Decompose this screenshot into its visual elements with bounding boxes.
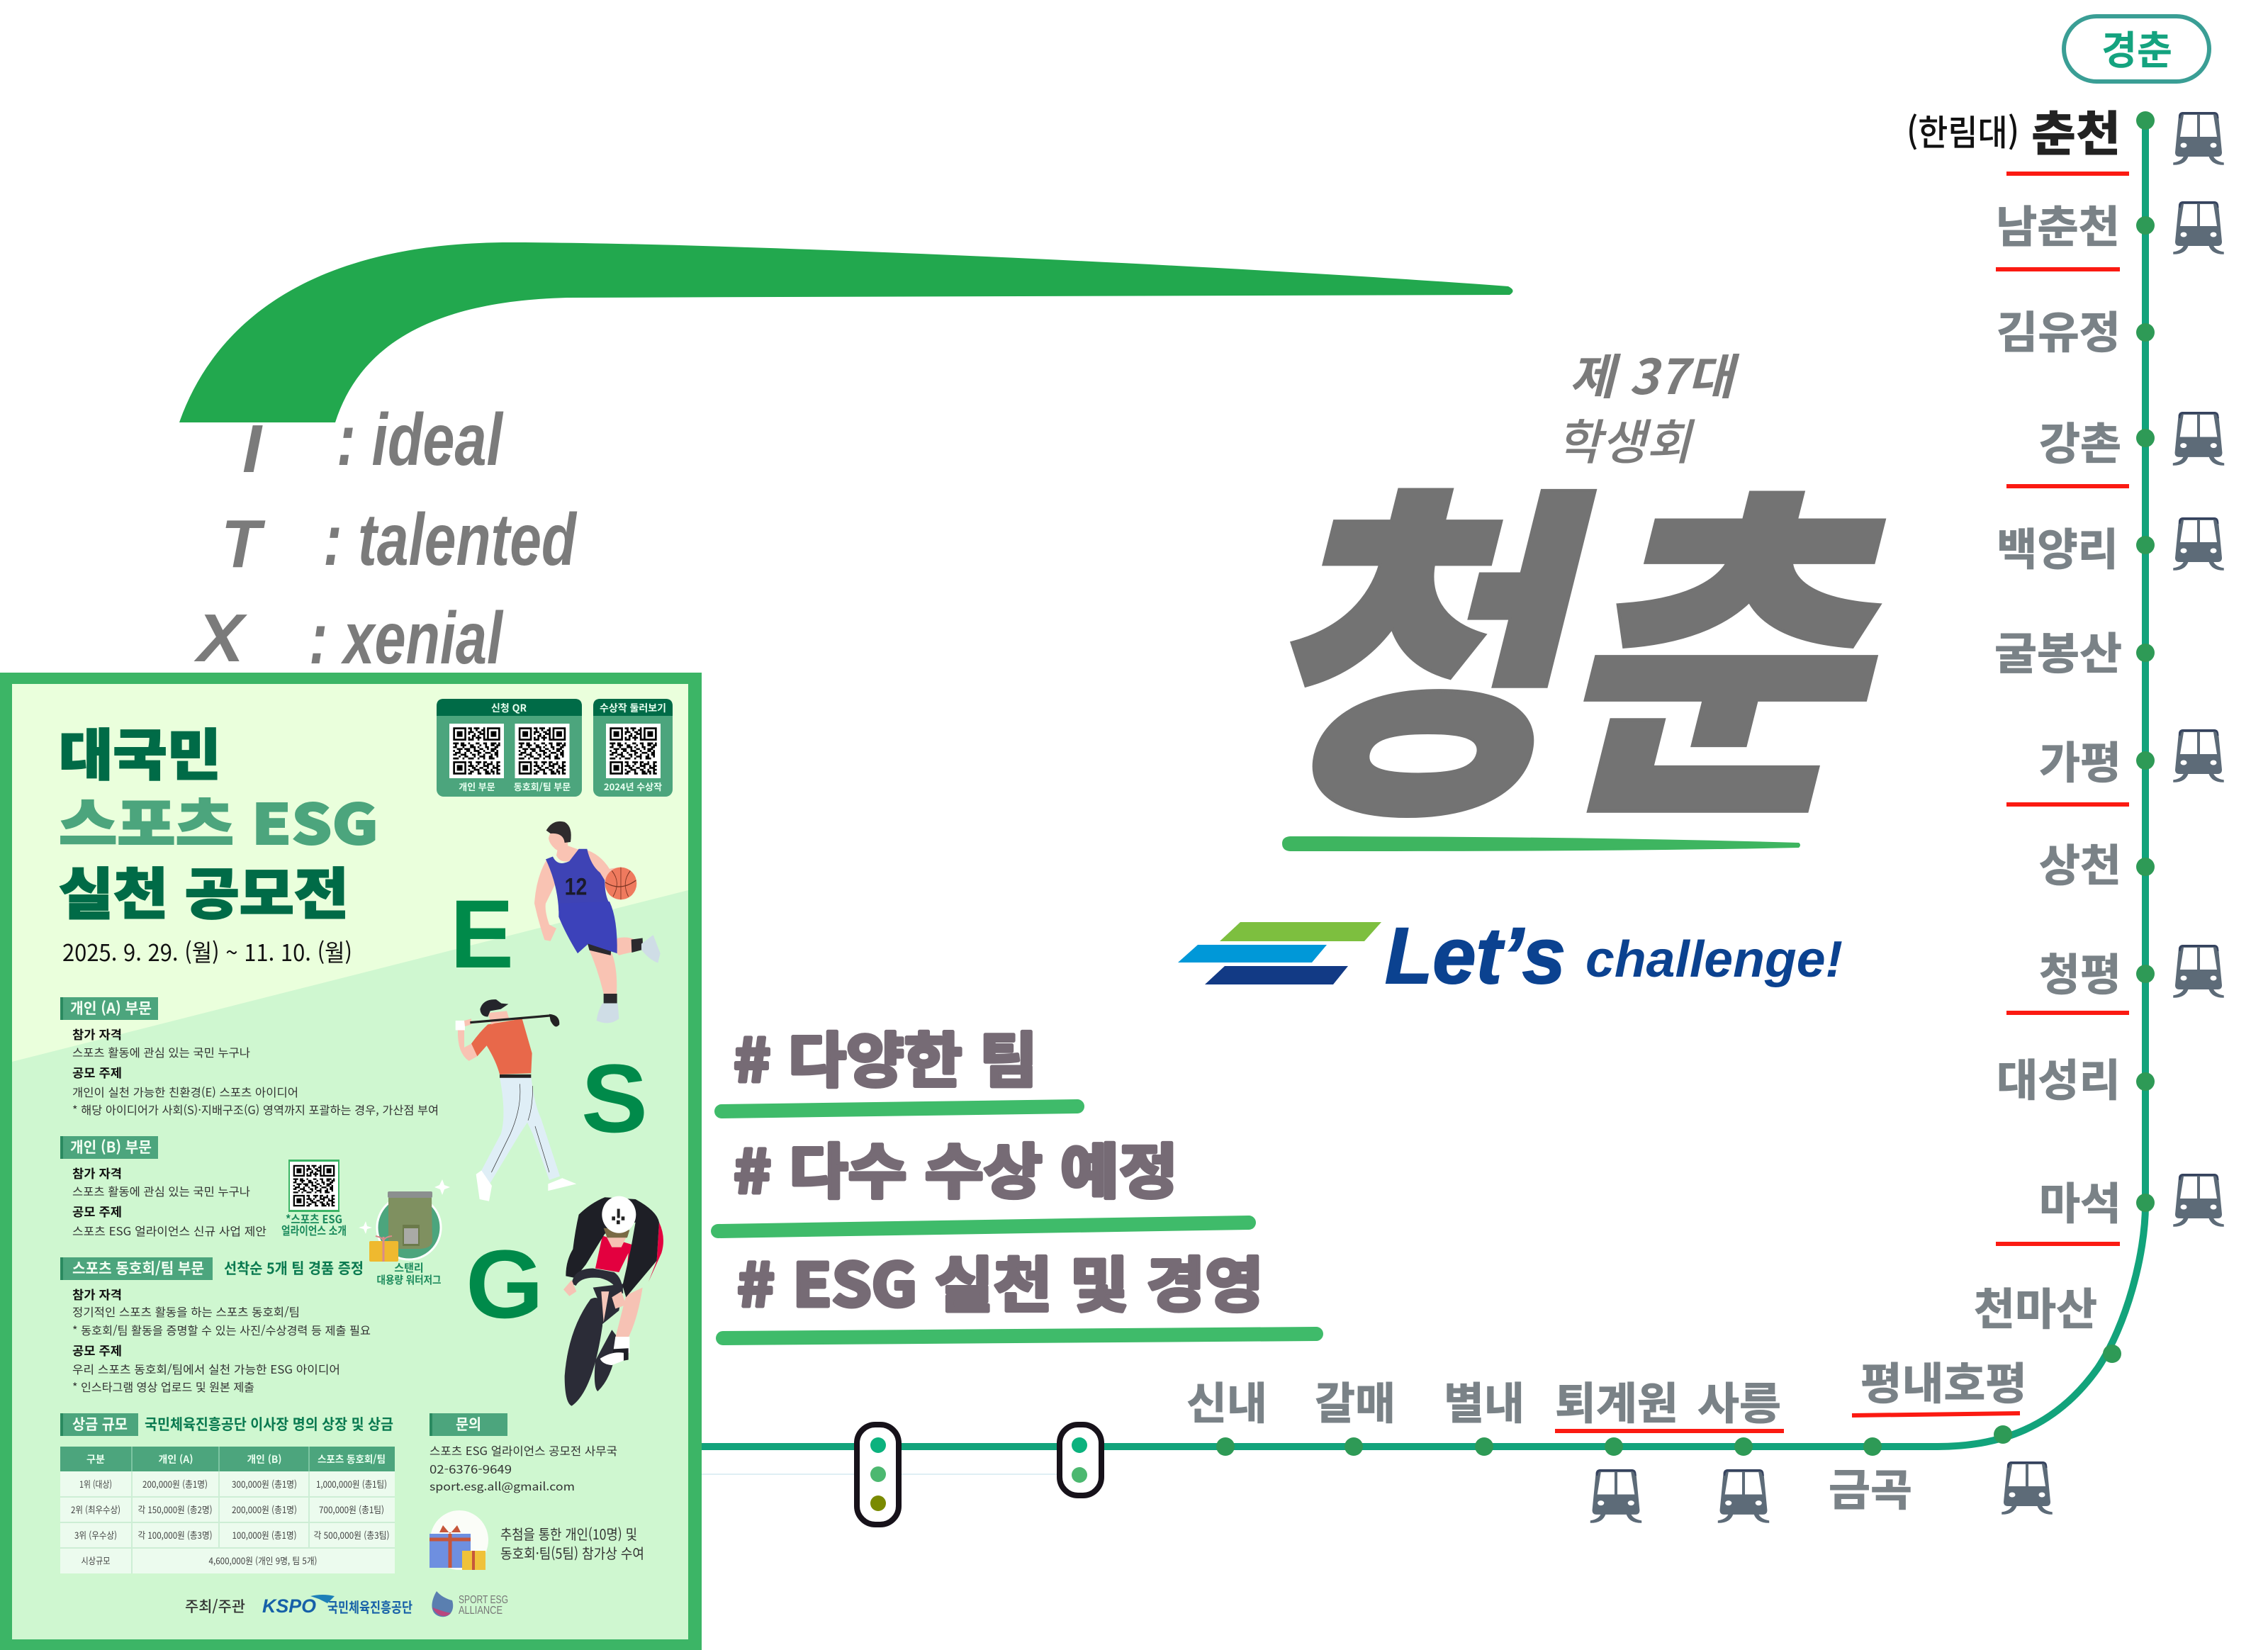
application QR card: 신청 QR [491,701,527,715]
letter E: E [450,880,514,989]
alliance QR [281,1160,347,1238]
red underlines marking stations [1555,174,2129,1431]
section: contact: 스포츠 ESG 얼라이언스 공모전 사무국 [430,1442,617,1459]
letter I: I [242,411,263,487]
section: individual A: 참가 자격 [72,1025,122,1043]
council number: 제 37대 [1566,338,1748,408]
section: individual B: 참가 자격 [72,1164,122,1182]
line name pill: 경춘 [2101,19,2172,77]
section: sports clubs: 공모 주제 [72,1341,122,1359]
line name pill [2064,16,2209,82]
section: prizes: 상금 규모 [72,1413,128,1435]
section: individual B: 스포츠 활동에 관심 있는 국민 누구나 [72,1182,250,1199]
poster date: 2025. 9. 29. (월) ~ 11. 10. (월) [62,934,352,968]
section: contact: 문의 [456,1413,481,1435]
Sangcheon: 상천 [2039,830,2121,894]
participation gift [430,1510,644,1570]
winners QR card [593,699,673,797]
poster footer logos: SPORT ESG [459,1594,508,1606]
poster title: 실천 공모전 [59,851,349,930]
section: sports clubs: 우리 스포츠 동호회/팀에서 실천 가능한 ESG 아이디어 [72,1360,340,1377]
Chuncheon: 춘천 [2031,95,2121,165]
prize table: 100,000원 (총1명) [232,1528,296,1542]
section: contact [430,1413,617,1494]
poster panel [0,673,702,1650]
Cheongpyeong: 청평 [2039,939,2121,1003]
alliance QR: 얼라이언스 소개 [281,1221,347,1238]
poster title: 대국민 [59,712,221,791]
prize table: 2위 (최우수상) [71,1503,120,1516]
Byeollae: 별내 [1444,1368,1525,1432]
logo tagline: challenge! [1585,931,1843,988]
Baegyangni: 백양리 [1997,514,2118,578]
council word: 학생회 [1553,403,1705,473]
prize table: 1위 (대상) [79,1477,112,1491]
poster footer logos: 주최/주관 [185,1595,245,1617]
section: individual B: 개인 (B) 부문 [70,1136,152,1157]
Gimyujeong: 김유정 [1997,297,2121,361]
signal light 1 [857,1425,899,1525]
Pyeongnaehopyeong: 평내호평 [1860,1348,2027,1412]
Namchuncheon: 남춘천 [1996,191,2120,255]
green swoosh [179,242,1513,422]
prize table: 시상규모 [81,1554,111,1567]
Sinnae: 신내 [1186,1368,1267,1432]
section: individual A: 스포츠 활동에 관심 있는 국민 누구나 [72,1043,250,1060]
prize table: 1,000,000원 (총1팀) [316,1477,387,1491]
prize table: 개인 (B) [247,1452,282,1466]
prize table [60,1447,395,1573]
section: sports clubs: 선착순 5개 팀 경품 증정 [224,1257,364,1279]
station dots [1216,111,2155,1456]
illustration: basketball player [534,821,661,1023]
hashtag 2 underline [718,1223,1249,1231]
hashtag 2: # 다수 수상 예정 [734,1125,1178,1211]
section: sports clubs: 정기적인 스포츠 활동을 하는 스포츠 동호회/팀 [72,1303,300,1320]
section: sports clubs [60,1257,371,1395]
prize table: 3위 (우수상) [74,1528,117,1542]
student council heading [1553,338,1748,473]
section: contact: 02-6376-9649 [430,1460,512,1477]
talented: : talented [323,499,578,581]
ITX acronym list [193,399,578,680]
ideal: : ideal [337,399,504,481]
application QR card: 개인 부문 [459,780,495,793]
prize table: 4,600,000원 (개인 9명, 팀 5개) [208,1554,318,1567]
poster title: 스포츠 ESG [59,781,378,860]
Galmae: 갈매 [1315,1368,1396,1432]
section: individual A: * 해당 아이디어가 사회(S)·지배구조(G) 영역까지 포괄하는 경우, 가산점 부여 [72,1101,439,1118]
poster footer logos [185,1591,508,1617]
Gapyeong: 가평 [2039,727,2121,791]
train icons [1591,112,2223,1522]
section: sports clubs: 스포츠 동호회/팀 부문 [72,1257,204,1279]
signal light 2 [1060,1425,1101,1495]
letter T: T [221,506,266,582]
title underline [1282,836,1800,851]
Gangchon: 강촌 [2039,408,2121,472]
logo bars [1178,922,1381,984]
application QR card: 동호회/팀 부문 [514,780,571,793]
winners QR card: 2024년 수상작 [604,780,662,793]
application QR card [437,699,582,797]
prize table: 스포츠 동호회/팀 [318,1452,386,1466]
illustration: golfer [456,999,576,1201]
station labels [1186,95,2122,1518]
big title 청춘: 청춘 [1224,381,1957,884]
section: sports clubs: * 인스타그램 영상 업로드 및 원본 제출 [72,1378,254,1395]
Stanley jug prize [359,1179,450,1287]
xenial: : xenial [309,597,504,680]
prize table: 개인 (A) [159,1452,193,1466]
section: individual A: 공모 주제 [72,1063,122,1081]
participation gift: 동호회·팀(5팀) 참가상 수여 [500,1542,644,1563]
Cheonmasan: 천마산 [1974,1274,2097,1337]
section: prizes: 국민체육진흥공단 이사장 명의 상장 및 상금 [145,1413,393,1435]
alliance QR: *스포츠 ESG [286,1210,342,1227]
hashtag 3 underline [723,1334,1316,1338]
prize table: 200,000원 (총1명) [142,1477,208,1491]
hashtag 3: # ESG 실천 및 경영 [737,1238,1264,1324]
Stanley jug prize: 대용량 워터저그 [377,1272,442,1287]
prize table: 700,000원 (총1팀) [319,1503,384,1516]
section: sports clubs: 참가 자격 [72,1285,122,1303]
metro line [702,120,2145,1474]
hashtag 1: # 다양한 팀 [734,1014,1038,1099]
section: individual B: 스포츠 ESG 얼라이언스 신규 사업 제안 [72,1222,266,1239]
Maseok: 마석 [2039,1168,2121,1232]
Daeseongni: 대성리 [1997,1045,2121,1109]
section: sports clubs: * 동호회/팀 활동을 증명할 수 있는 사진/수상경력 등 제출 필요 [72,1321,371,1338]
section: prizes [60,1413,393,1436]
Geumgok: 금곡 [1829,1454,1912,1518]
section: individual B [60,1136,266,1239]
Sareung: 사릉 [1697,1368,1781,1432]
prize table: 300,000원 (총1명) [232,1477,297,1491]
prize table: 200,000원 (총1명) [232,1503,297,1516]
letter X: X [193,600,247,676]
section: individual A [60,997,439,1118]
participation gift: 추첨을 통한 개인(10명) 및 [500,1523,637,1544]
hashtags [718,1014,1316,1338]
letter G: G [466,1230,544,1339]
poster footer logos: KSPO [262,1595,316,1617]
Gulbongsan: 굴봉산 [1994,618,2122,682]
letter S: S [581,1045,648,1153]
logo wordmark: Let’s [1385,911,1566,1000]
winners QR card: 수상작 둘러보기 [600,701,666,715]
Stanley jug prize: 스탠리 [394,1260,424,1275]
prize table: 각 500,000원 (총3팀) [313,1528,390,1542]
prize table: 각 150,000원 (총2명) [137,1503,213,1516]
section: contact: sport.esg.all@gmail.com [430,1477,575,1494]
prize table: 각 100,000원 (총3명) [137,1528,213,1542]
section: individual A: 개인이 실천 가능한 친환경(E) 스포츠 아이디어 [72,1083,298,1100]
illustration: cyclist [563,1196,663,1406]
poster title [59,712,378,930]
poster footer logos: ALLIANCE [459,1605,503,1617]
Let's challenge logo [1178,911,1843,1000]
hashtag 1 underline [722,1106,1077,1111]
poster footer logos: 국민체육진흥공단 [327,1596,412,1617]
Toegyewon: 퇴계원 [1555,1368,1678,1432]
prize table: 구분 [86,1452,105,1466]
section: individual A: 개인 (A) 부문 [70,997,152,1018]
section: individual B: 공모 주제 [72,1202,122,1220]
Hallym annotation: (한림대) [1907,105,2019,156]
illustration: basketball player: 12 [565,874,587,901]
